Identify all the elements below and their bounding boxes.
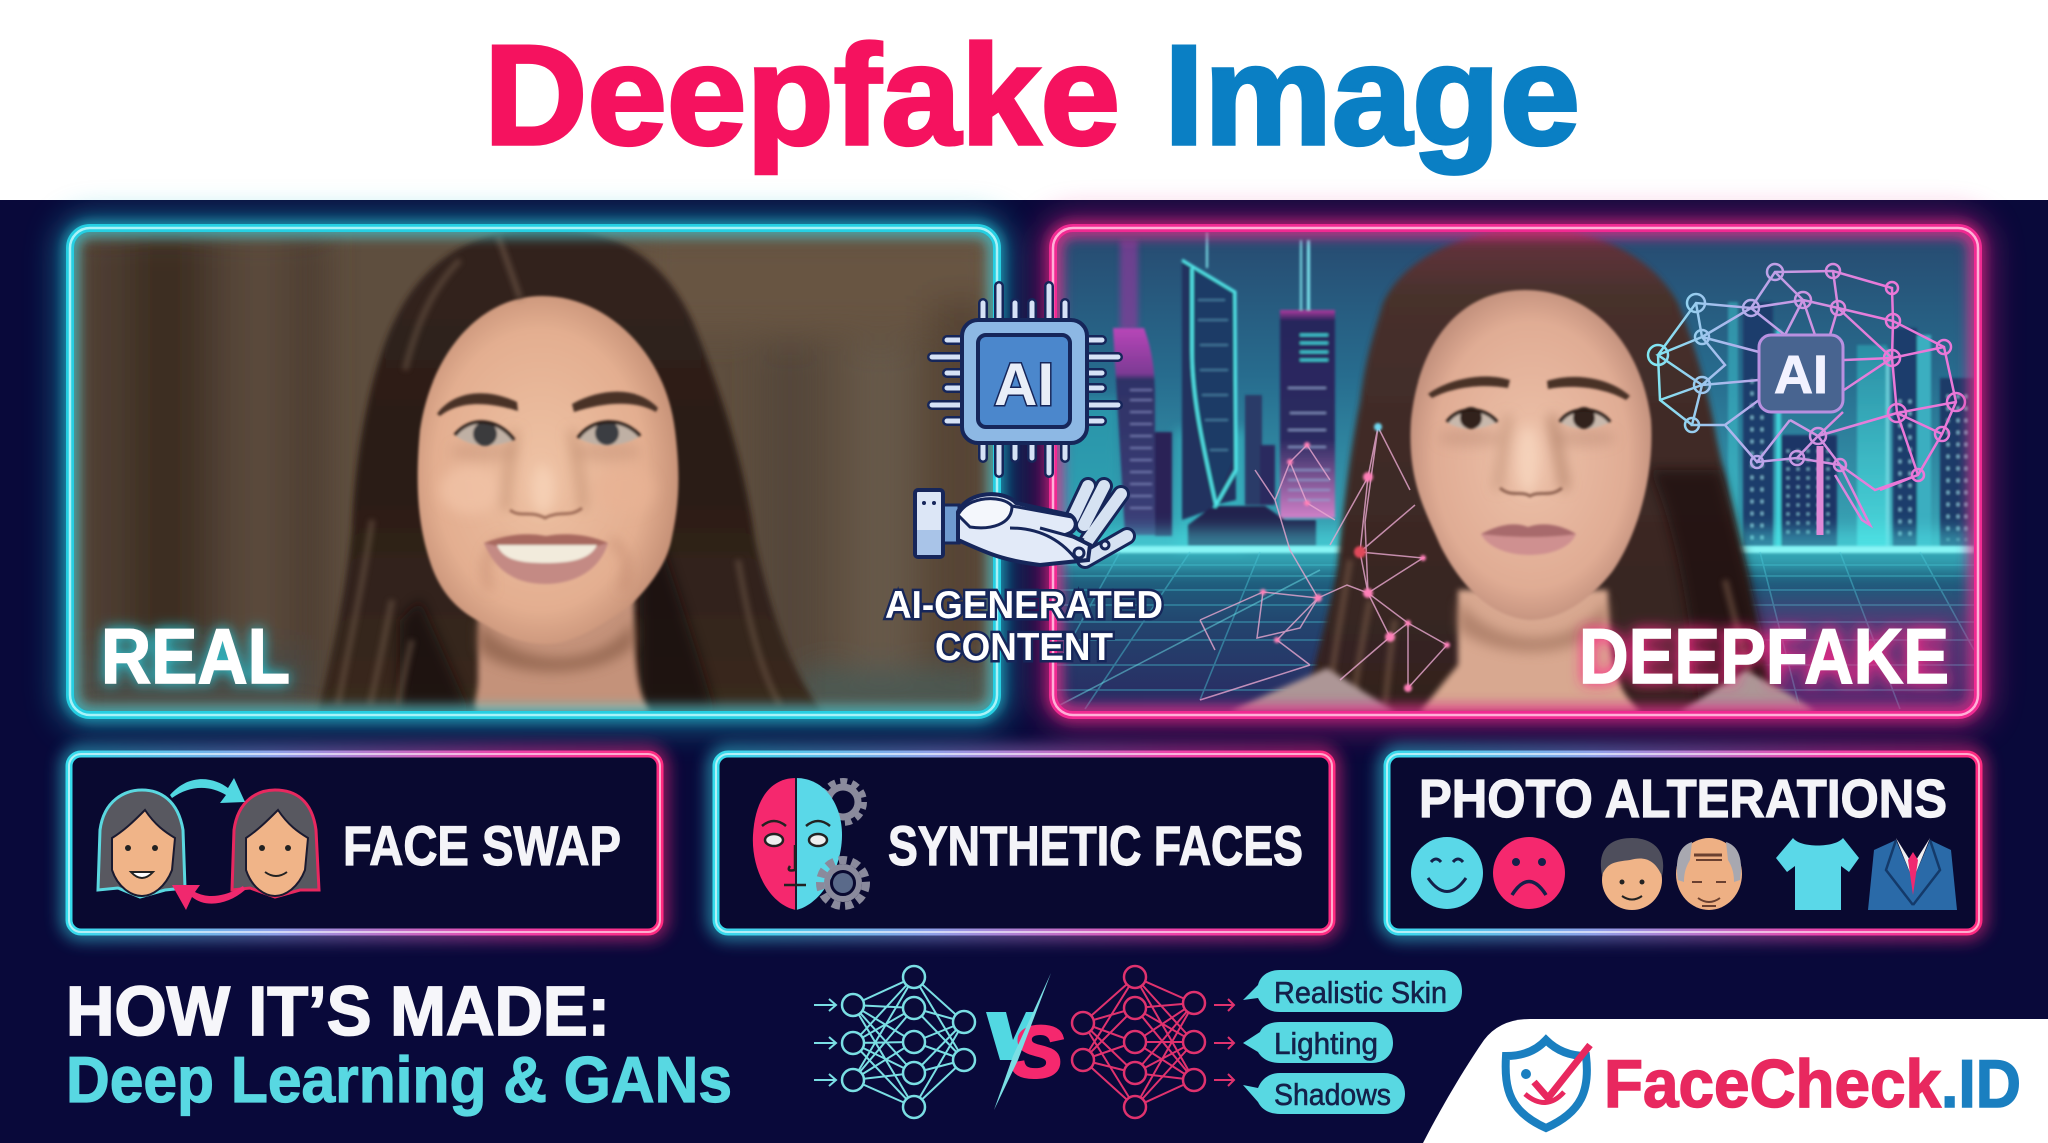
frame glow	[70, 228, 997, 715]
logo panel: .ID	[1941, 1046, 2021, 1122]
icon: happy face	[1411, 837, 1483, 909]
subheading: Deep Learning & GANs	[66, 1043, 732, 1116]
eyes	[455, 421, 640, 446]
icon: suit	[1868, 838, 1957, 910]
icon: robot hand	[915, 486, 1127, 565]
callout: realistic skin: Realistic Skin	[1274, 975, 1447, 1010]
arrow: bottom swap	[172, 885, 245, 910]
label: AI-generated content: CONTENT	[935, 626, 1113, 669]
icon: sad face	[1493, 837, 1565, 909]
AI badge	[1759, 335, 1843, 412]
title band	[0, 0, 2048, 200]
icon: young man	[1601, 838, 1663, 910]
frame glow	[1053, 228, 1978, 715]
title: Deepfake: Deepfake	[484, 16, 1120, 175]
logo panel	[1423, 1019, 2048, 1143]
panel: synthetic faces	[716, 754, 1332, 932]
neck	[1420, 590, 1640, 712]
hair part highlight	[498, 236, 520, 298]
heading: how it's made: HOW IT’S MADE:	[66, 972, 610, 1050]
neural brain	[1648, 264, 1965, 535]
chip text: AI	[994, 351, 1054, 418]
nostril line	[1500, 488, 1562, 496]
inner edge haze	[74, 232, 993, 711]
icon: shield	[1506, 1040, 1590, 1128]
hair	[318, 228, 822, 712]
frame neon stroke	[1053, 228, 1978, 715]
frame neon stroke	[70, 228, 997, 715]
photo: real woman	[74, 228, 1000, 712]
label: Face Swap: FACE SWAP	[343, 814, 621, 877]
right skyline	[1728, 302, 1974, 547]
cheek and nose shading	[442, 430, 635, 586]
title: Image: Image	[1164, 16, 1580, 175]
icon: left face	[98, 790, 185, 897]
horizon glow	[1057, 546, 1974, 553]
neck	[475, 600, 650, 712]
heading: how it's made	[66, 972, 732, 1116]
pink haze behind label	[1754, 594, 1974, 711]
chart: neural network cyan	[814, 966, 975, 1118]
callout: shadows	[1243, 1073, 1405, 1114]
network mesh	[1200, 427, 1447, 700]
label: REAL: REAL	[101, 612, 290, 700]
panel: face swap	[69, 754, 660, 932]
icon: split face	[753, 778, 866, 910]
callout: lighting: Lighting	[1274, 1026, 1378, 1061]
panel: real photo	[70, 228, 1000, 715]
eyebrows	[437, 393, 518, 416]
icon: AI chip	[932, 286, 1118, 473]
panel: photo alterations	[1387, 754, 1979, 932]
icon: versus mark	[986, 973, 1063, 1110]
eyebrows	[1428, 376, 1510, 398]
AI badge: AI	[1774, 345, 1828, 405]
label: Synthetic Faces: SYNTHETIC FACES	[888, 814, 1303, 877]
label: AI-generated content: AI-GENERATED	[885, 584, 1163, 627]
arrow: top swap	[170, 778, 245, 803]
nostril line	[510, 508, 582, 518]
callout: shadows: Shadows	[1274, 1077, 1391, 1112]
lips	[1481, 524, 1576, 555]
icon: right face	[232, 790, 319, 897]
face	[418, 296, 678, 644]
floor grid	[1057, 552, 1974, 709]
icon: t-shirt	[1776, 838, 1859, 910]
facial shading	[1438, 415, 1616, 494]
hair	[1306, 228, 1780, 712]
label: DEEPFAKE: DEEPFAKE	[1579, 612, 1949, 700]
panel: deepfake image	[1053, 228, 1978, 715]
callout: lighting	[1243, 1022, 1393, 1063]
chart: neural network pink	[1072, 966, 1234, 1118]
mouth	[484, 534, 608, 584]
face	[1410, 290, 1652, 620]
icon: versus mark: S	[1011, 1013, 1063, 1093]
label: AI-generated content	[885, 584, 1163, 669]
shoulders	[1230, 668, 1815, 712]
logo text: FaceCheck	[1604, 1046, 1941, 1122]
cyber city background	[1057, 228, 1974, 712]
left skyline	[1113, 232, 1335, 546]
icon: old man	[1676, 838, 1742, 910]
eyes	[1447, 407, 1610, 429]
inner edge haze	[1057, 232, 1974, 711]
label: Photo Alterations: PHOTO ALTERATIONS	[1419, 769, 1947, 829]
